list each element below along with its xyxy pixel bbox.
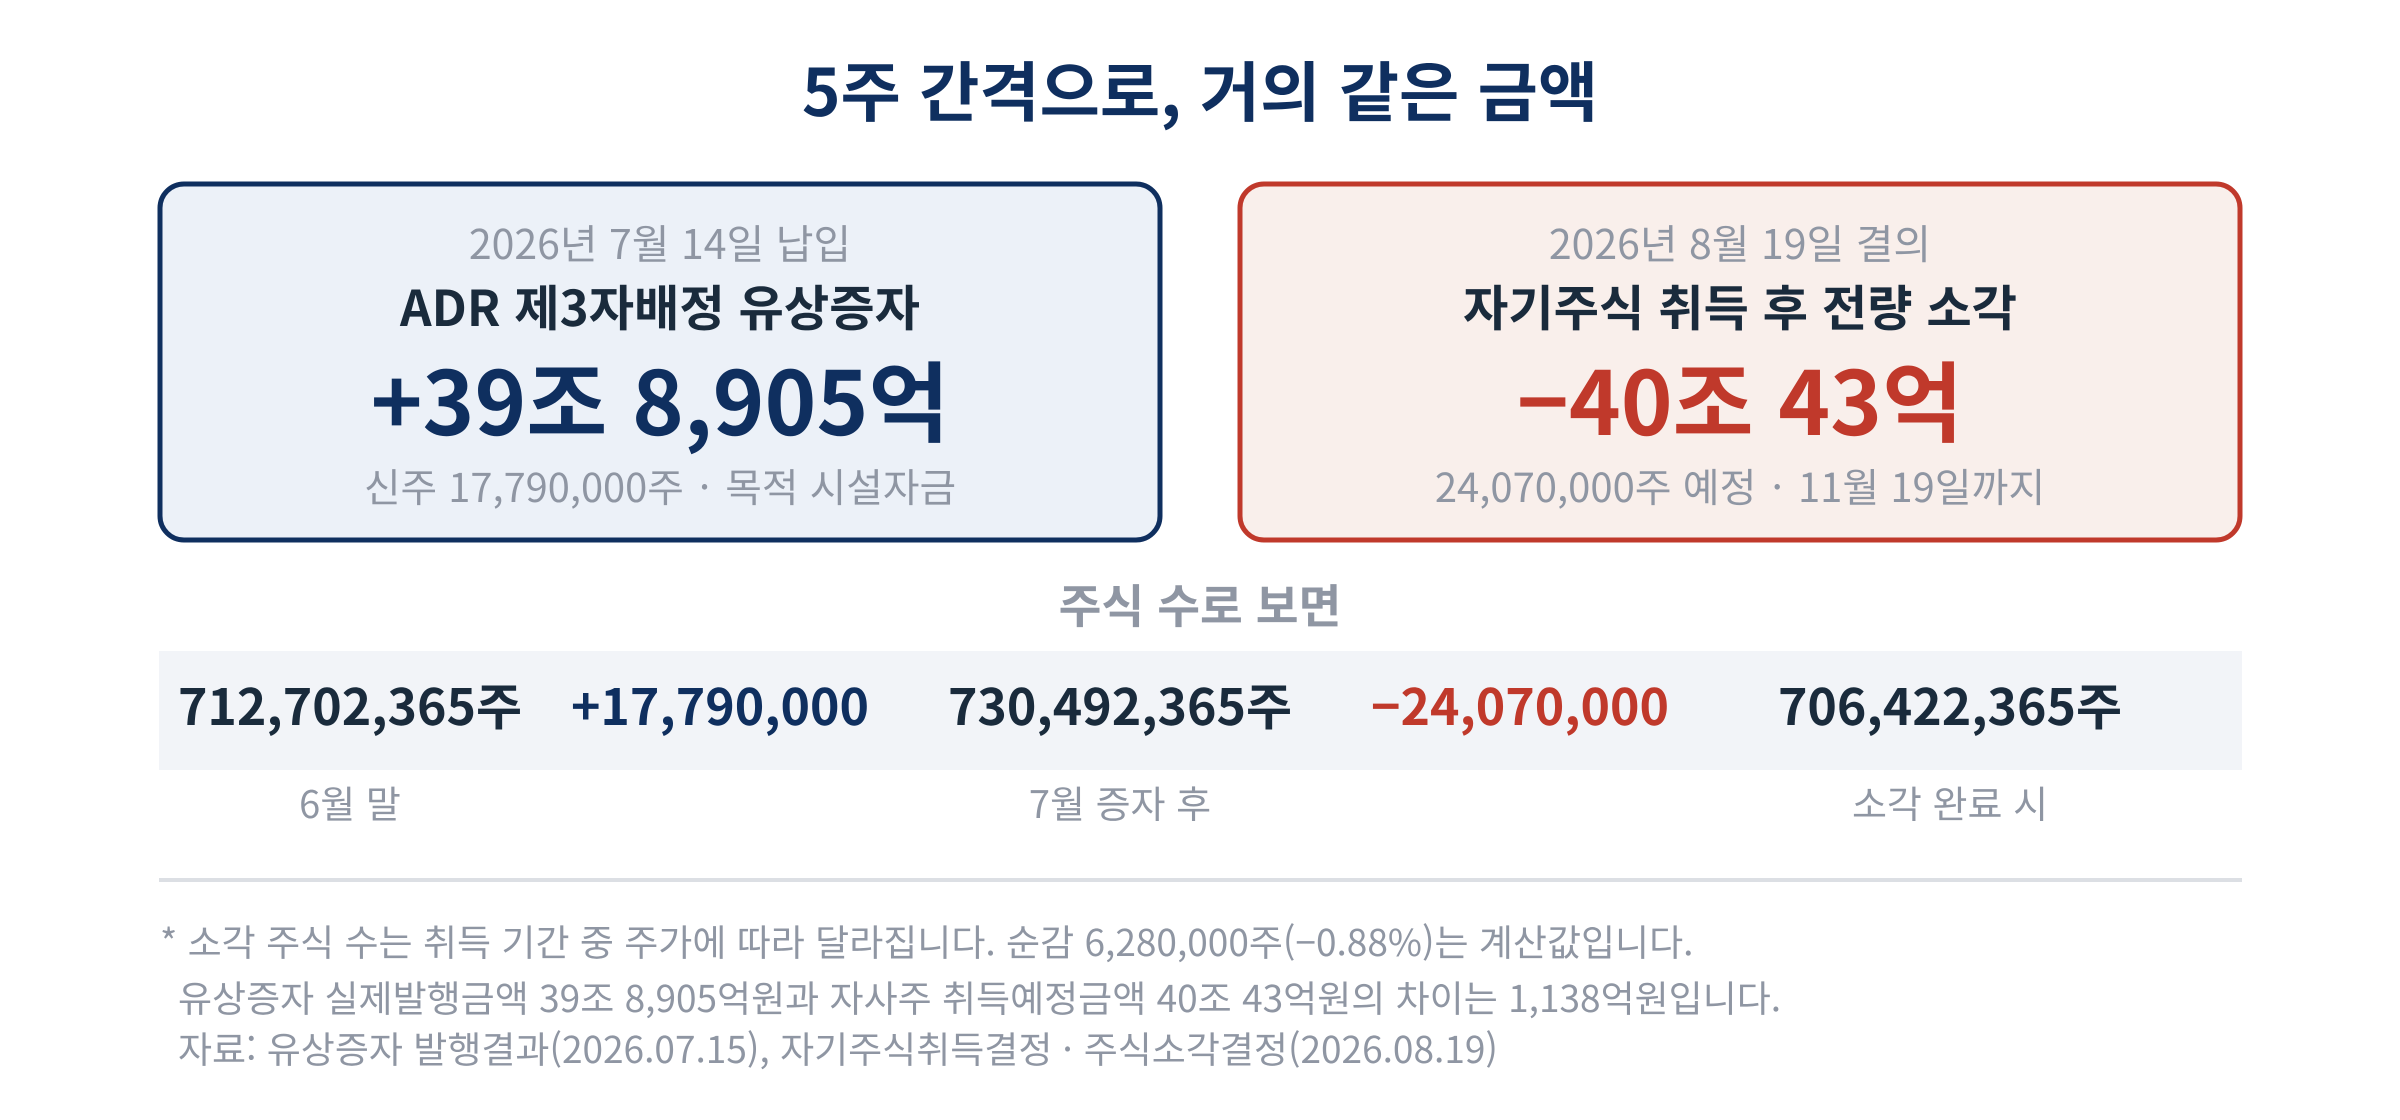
post-offering shares: 730,492,365주 <box>948 668 1292 740</box>
new shares issued: +17,790,000 <box>571 668 869 740</box>
shares to be cancelled: −24,070,000 <box>1371 668 1669 740</box>
panel amount: +39조 8,905억 <box>371 334 949 461</box>
panel heading: 자기주식 취득 후 전량 소각 <box>1463 270 2017 341</box>
footnotes: 자료: 유상증자 발행결과(2026.07.15), 자기주식취득결정 · 주식소각결정(2026.08.19) <box>178 1020 1498 1074</box>
panel date: 2026년 8월 19일 결의 <box>1549 211 1931 271</box>
footnotes <box>160 913 1781 1074</box>
June-end shares: 712,702,365주 <box>178 668 522 740</box>
label: after cancellation: 소각 완료 시 <box>1852 774 2048 829</box>
panel: treasury share sale <box>1240 184 2240 540</box>
panel heading: ADR 제3자배정 유상증자 <box>399 270 920 341</box>
footnotes: * 소각 주식 수는 취득 기간 중 주가에 따라 달라집니다. 순감 6,280,000주(−0.88%)는 계산값입니다. <box>160 913 1693 967</box>
label: after July offering: 7월 증자 후 <box>1029 774 1211 829</box>
footnotes: 유상증자 실제발행금액 39조 8,905억원과 자사주 취득예정금액 40조 43억원의 차이는 1,138억원입니다. <box>178 969 1781 1023</box>
post-cancellation shares: 706,422,365주 <box>1778 668 2122 740</box>
panel detail: 신주 17,790,000주 · 목적 시설자금 <box>364 457 956 514</box>
panel amount: −40조 43억 <box>1517 334 1963 461</box>
section heading: 주식 수로 보면 <box>1059 570 1341 637</box>
title: 5주 간격으로, 거의 같은 금액 <box>802 40 1598 135</box>
label: June end: 6월 말 <box>299 774 401 829</box>
panel detail: 24,070,000주 예정 · 11월 19일까지 <box>1435 456 2045 514</box>
share count table <box>159 651 2242 770</box>
panel: ADR rights offering <box>160 184 1160 540</box>
panel date: 2026년 7월 14일 납입 <box>469 211 851 271</box>
